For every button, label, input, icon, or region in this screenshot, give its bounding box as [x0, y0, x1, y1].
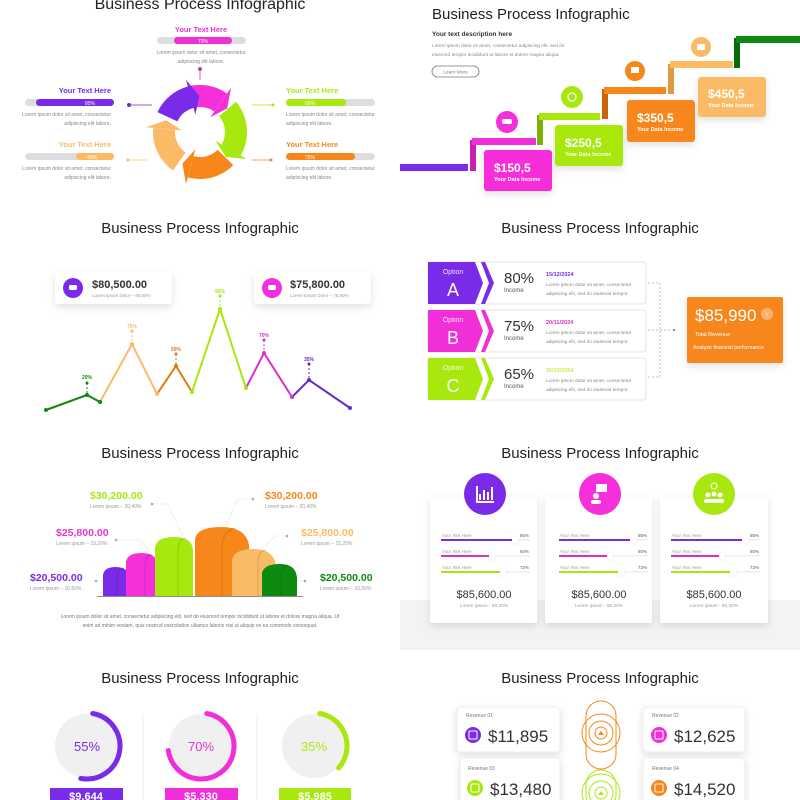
line chart [46, 296, 350, 410]
card 1: 85% [520, 533, 529, 538]
option B: Income [504, 336, 524, 342]
card 3 [660, 473, 768, 623]
left item light orange: Lorem ipsum dolor sit amet, consectetur [22, 166, 111, 172]
option B: adipiscing elit, sed do eiusmod tempor. [546, 339, 629, 345]
right item orange: 75% [305, 155, 316, 161]
revenue 03: Revenue 03 [468, 766, 495, 772]
left item purple: adipiscing elit labore. [64, 121, 111, 127]
title 7: Business Process Infographic [101, 670, 299, 687]
donut 55% [49, 708, 125, 800]
card 2: Lorem ipsum - 50,20% [575, 603, 624, 609]
card 2: $85,600.00 [571, 589, 627, 601]
revenue 02 [643, 707, 745, 752]
card 2: 85% [638, 533, 647, 538]
card 3: $85,600.00 [686, 589, 742, 601]
option A [428, 262, 646, 304]
card 2 [254, 272, 371, 304]
donut 55%: 55% [74, 739, 100, 754]
card 3: Your Text Here [672, 533, 702, 538]
option C [428, 358, 646, 400]
option C: C [446, 376, 460, 396]
card 1: Your Text Here [442, 565, 472, 570]
right item orange [252, 140, 375, 181]
left item purple: Your Text Here [59, 86, 111, 95]
cycle arrows [146, 80, 247, 184]
card 2: Your Text Here [560, 565, 590, 570]
revenue 03: $13,480 [490, 780, 551, 799]
left item light orange: 45% [87, 155, 98, 161]
arch caption: enim ad minim veniam, quis nostrud exercitation ullamco laboris nisi ut aliquip ex ea commodo consequat. [83, 623, 317, 629]
chart points and labels: 20% [82, 375, 93, 381]
description: Your text description here [432, 31, 512, 38]
arch labels: $30,200.00 [265, 490, 318, 502]
option A: A [447, 280, 459, 300]
city background [400, 600, 800, 650]
right item orange: Your Text Here [286, 140, 338, 149]
ribbon steps [400, 36, 800, 171]
arch labels: Lorem ipsum – 15,20% [301, 541, 353, 547]
total revenue box: $85,990 [695, 306, 756, 325]
revenue 03 [460, 758, 560, 800]
card 1: Your Text Here [442, 549, 472, 554]
panel: options [428, 220, 783, 400]
top item [157, 25, 246, 80]
arch labels: $20,500.00 [30, 572, 83, 584]
revenue 04: $14,520 [674, 780, 735, 799]
chart points and labels: 75% [127, 324, 138, 330]
panel: donuts [49, 670, 352, 800]
data boxes [484, 77, 766, 191]
panel: cycle infographic [22, 0, 375, 184]
total revenue box [687, 297, 783, 363]
option B: Lorem ipsum dolor sit amet, consectetur [546, 330, 632, 336]
title 2: Business Process Infographic [432, 6, 630, 23]
donut 70%: 70% [188, 739, 214, 754]
card 1: 60% [520, 549, 529, 554]
option A: Option [443, 269, 463, 276]
option B: 75% [504, 318, 534, 335]
left item light orange: adipiscing elit labore. [64, 175, 111, 181]
card 1: $80,500.00 [92, 279, 147, 291]
left item purple: Lorem ipsum dolor sit amet, consectetur [22, 112, 111, 118]
description: Learn More [443, 70, 468, 76]
revenue 01: Revenue 01 [466, 713, 493, 719]
option A: Lorem ipsum dolor sit amet, consectetur [546, 282, 632, 288]
card 3: 72% [750, 565, 759, 570]
donut 70% [163, 708, 239, 800]
panel: cards with sliders [400, 445, 800, 650]
left item light orange: Your Text Here [59, 140, 111, 149]
revenue 02: $12,625 [674, 727, 735, 746]
box texts [494, 87, 754, 183]
box texts: Your Data Income [708, 103, 754, 109]
box texts: $250,5 [565, 136, 602, 150]
right item lime: adipiscing elit labore. [286, 121, 333, 127]
step icons [496, 37, 711, 133]
center pills [582, 701, 620, 800]
chart points and labels: 90% [215, 289, 226, 295]
right item lime: Your Text Here [286, 86, 338, 95]
arch labels: $25,800.00 [56, 527, 109, 539]
arch labels: Lorem ipsum – 20,40% [265, 504, 317, 510]
top item: Lorem ipsum dolor sit amet, consectetur [157, 50, 246, 56]
chart points and labels: 35% [304, 357, 315, 363]
arch labels: Lorem ipsum – 10,50% [30, 586, 82, 592]
top item: 70% [198, 39, 209, 45]
revenue 02: Revenue 02 [652, 713, 679, 719]
total revenue box: Total Revenue [695, 332, 730, 338]
right item lime: Lorem ipsum dolor sit amet, consectetur [286, 112, 375, 118]
card 2: $75,800.00 [290, 279, 345, 291]
panel: line chart [44, 220, 371, 412]
card 1 [55, 272, 172, 304]
arch labels: $30,200.00 [90, 490, 143, 502]
chart points and labels: 50% [171, 347, 182, 353]
card 3: Your Text Here [672, 549, 702, 554]
title 3: Business Process Infographic [101, 220, 299, 237]
arch labels: Lorem ipsum – 20,40% [90, 504, 142, 510]
total revenue box: ↑ [765, 312, 769, 319]
panel: staircase [400, 6, 800, 191]
arch caption [61, 614, 340, 629]
title 8: Business Process Infographic [501, 670, 699, 687]
box texts: Your Data Income [494, 177, 540, 183]
card 1: Your Text Here [442, 533, 472, 538]
right item orange: Lorem ipsum dolor sit amet, consectetur [286, 166, 375, 172]
right item orange: adipiscing elit labore. [286, 175, 333, 181]
connector [648, 283, 675, 377]
chart points and labels [44, 289, 352, 412]
option A: 15/12/2024 [546, 272, 574, 278]
description [432, 31, 565, 77]
arches [97, 527, 303, 596]
option B [428, 310, 646, 352]
top item: Your Text Here [175, 25, 227, 34]
card 3: 85% [750, 533, 759, 538]
revenue 04 [643, 758, 745, 800]
card 1: Lorem ipsum - 50,20% [460, 603, 509, 609]
option C: 31/10/2024 [546, 368, 574, 374]
arch labels: Lorem ipsum – 15,20% [56, 541, 108, 547]
option C: Income [504, 384, 524, 390]
card 2: 60% [638, 549, 647, 554]
donut 35% [276, 708, 352, 800]
revenue 01: $11,895 [488, 727, 548, 746]
box texts: $150,5 [494, 161, 531, 175]
left item light orange [22, 140, 147, 181]
donut 35%: 35% [301, 739, 327, 754]
title 5: Business Process Infographic [101, 445, 299, 462]
left item purple: 85% [85, 101, 96, 107]
box texts: $450,5 [708, 87, 745, 101]
option B: B [447, 328, 459, 348]
description: eiusmod tempor incididunt ut labore et dolore magna aliqua. [432, 52, 559, 58]
card 1: 72% [520, 565, 529, 570]
card 3: 60% [750, 549, 759, 554]
card 3: Lorem ipsum - 50,20% [690, 603, 739, 609]
right item lime [252, 86, 375, 127]
left item purple [22, 86, 152, 127]
right item lime: 65% [305, 101, 316, 107]
revenue 04: Revenue 04 [652, 766, 679, 772]
panel: revenue [457, 670, 745, 800]
card 2: 72% [638, 565, 647, 570]
option C: Lorem ipsum dolor sit amet, consectetur [546, 378, 632, 384]
option A: 80% [504, 270, 534, 287]
card 2: Lorem Ipsum Dolor – 75,80% [290, 293, 349, 298]
title 6: Business Process Infographic [501, 445, 699, 462]
box texts: Your Data Income [637, 127, 683, 133]
arch labels [30, 490, 373, 592]
option A: adipiscing elit, sed do eiusmod tempor. [546, 291, 629, 297]
arch labels: Lorem ipsum – 10,50% [320, 586, 372, 592]
option A: Income [504, 288, 524, 294]
card 1: $85,600.00 [456, 589, 512, 601]
total revenue box: Analyze financial performance [693, 345, 764, 351]
card 1 [430, 473, 537, 623]
box texts: $350,5 [637, 111, 674, 125]
card 3: Your Text Here [672, 565, 702, 570]
arch caption: Lorem ipsum dolor sit amet, consectetur adipiscing elit, sed do eiusmod tempor incididunt ut labore et dolore magna aliqua. Ut [61, 614, 340, 620]
option B: 20/11/2024 [546, 320, 574, 326]
option C: Option [443, 365, 463, 372]
top item: adipiscing elit labore. [178, 59, 224, 65]
option B: Option [443, 317, 463, 324]
revenue 01 [457, 707, 560, 752]
card 1: Lorem Ipsum Dolor – 80,50% [92, 293, 151, 298]
box texts: Your Data Income [565, 152, 611, 158]
option C: 65% [504, 366, 534, 383]
arch labels: $25,800.00 [301, 527, 354, 539]
panel: arch chart [30, 445, 373, 629]
title 4: Business Process Infographic [501, 220, 699, 237]
arch labels: $20,500.00 [320, 572, 373, 584]
card 2: Your Text Here [560, 549, 590, 554]
card 2: Your Text Here [560, 533, 590, 538]
chart points and labels: 70% [259, 333, 270, 339]
card 2 [545, 473, 652, 623]
option C: adipiscing elit, sed do eiusmod tempor. [546, 387, 629, 393]
description: Lorem ipsum dolor sit amet, consectetur adipiscing elit, sed do [432, 43, 565, 49]
